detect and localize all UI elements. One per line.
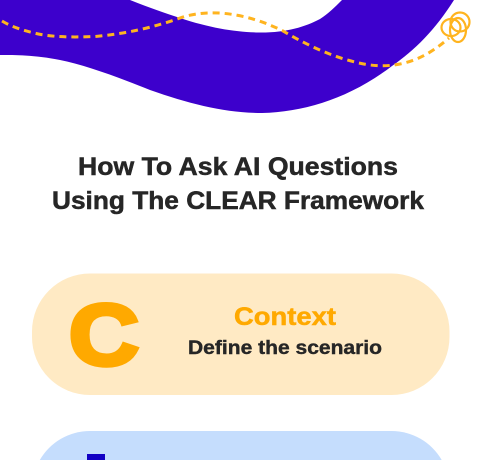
dashed flight path bbox=[2, 13, 449, 66]
panel: context bbox=[32, 274, 450, 395]
letter C: C bbox=[69, 288, 139, 384]
title: Using The CLEAR Framework bbox=[52, 187, 424, 215]
purple ribbon bbox=[0, 0, 454, 113]
title bbox=[52, 153, 424, 215]
panel: L card bbox=[40, 431, 442, 460]
context heading: Context bbox=[234, 303, 337, 331]
context description: Define the scenario bbox=[188, 338, 382, 359]
title: How To Ask AI Questions bbox=[78, 153, 398, 181]
icon: loop knot bbox=[442, 12, 470, 42]
letter L top stub, cut off by the frame bbox=[87, 454, 105, 460]
